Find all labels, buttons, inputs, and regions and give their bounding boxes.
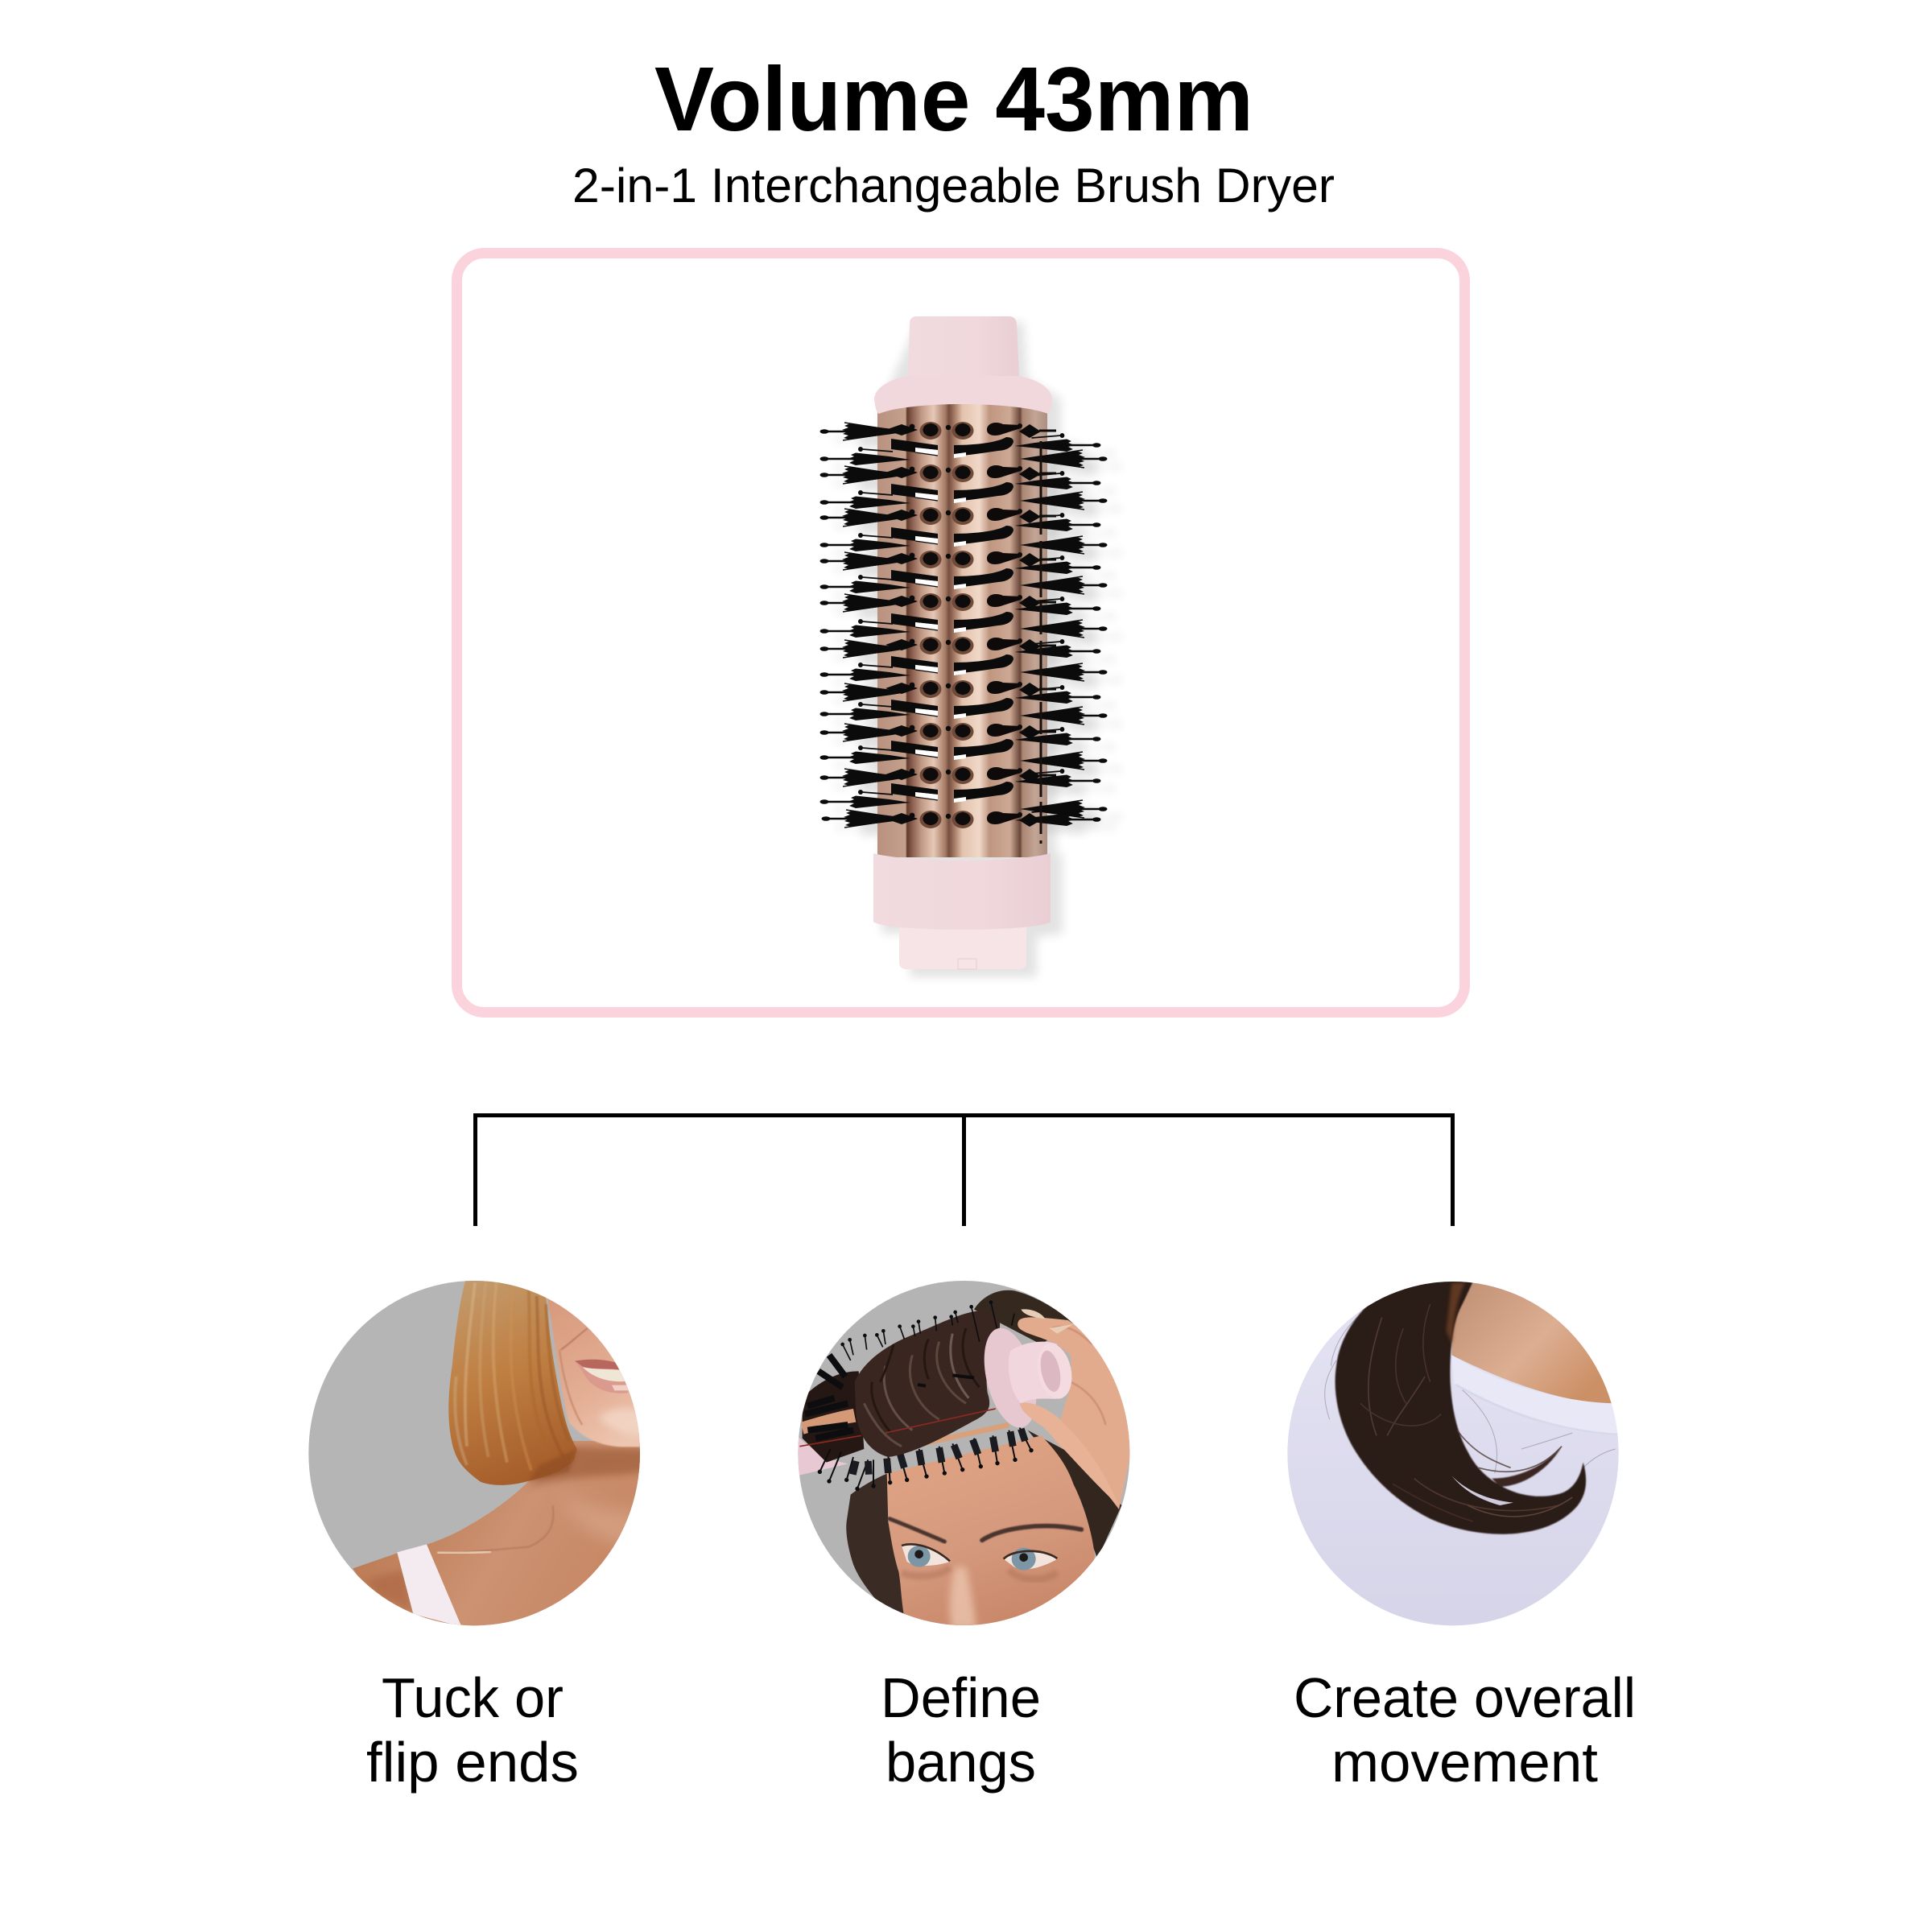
face — [547, 1298, 640, 1447]
hair — [448, 1278, 577, 1485]
lower bristles — [818, 1427, 1034, 1491]
side hair right — [1028, 1430, 1121, 1559]
side hair left — [846, 1473, 906, 1616]
barrel slots — [891, 437, 1013, 803]
bristle tufts — [819, 423, 1108, 828]
label: create overall movement: Create overall — [1294, 1666, 1636, 1729]
brush shadow — [834, 322, 1122, 977]
white tank strap — [397, 1544, 461, 1627]
hair wrapped on brush — [855, 1311, 1000, 1457]
brush barrel — [877, 394, 1047, 857]
hand — [1018, 1317, 1131, 1509]
label: define bangs — [881, 1666, 1041, 1794]
title: Volume 43mm — [654, 48, 1253, 150]
label: tuck or flip ends: Tuck or — [382, 1666, 564, 1729]
label: tuck or flip ends — [366, 1666, 579, 1794]
label: create overall movement — [1294, 1666, 1636, 1794]
subtitle: 2-in-1 Interchangeable Brush Dryer — [572, 159, 1335, 213]
photo: define bangs — [798, 1281, 1130, 1625]
connector bracket — [473, 1113, 1455, 1226]
hair lock — [1335, 1278, 1586, 1534]
outer vertical seam — [1040, 441, 1042, 844]
eyebrows — [890, 1519, 1081, 1542]
label: create overall movement: movement — [1331, 1731, 1598, 1794]
upper bristle tips — [805, 1300, 1014, 1439]
handle and left brush — [797, 1435, 848, 1476]
label: define bangs: bangs — [886, 1731, 1036, 1794]
face — [887, 1435, 1095, 1629]
bottom collar — [873, 853, 1051, 930]
fingers and nails — [1018, 1322, 1055, 1343]
panel: product frame — [457, 253, 1465, 1013]
label: define bangs: Define — [881, 1666, 1041, 1729]
thumb — [1019, 1402, 1110, 1497]
barrel stripe — [924, 1422, 1009, 1446]
top flange — [874, 376, 1052, 414]
shoulder and neck skin — [353, 1441, 640, 1626]
wisps behind — [1325, 1315, 1616, 1473]
top cap — [908, 316, 1019, 378]
barrel holes — [886, 422, 1056, 828]
neck skin — [1451, 1282, 1612, 1404]
photo: tuck or flip ends — [308, 1281, 640, 1626]
photo: create overall movement — [1287, 1282, 1619, 1626]
eyes — [902, 1544, 1057, 1571]
label: tuck or flip ends: flip ends — [366, 1731, 579, 1794]
lips and teeth — [575, 1360, 629, 1393]
back hair — [974, 1290, 1073, 1344]
red detail — [799, 1409, 996, 1447]
product image: round brush attachment — [819, 316, 1122, 977]
base nozzle — [899, 926, 1026, 969]
pink cap — [984, 1328, 1072, 1428]
shirt collar — [1451, 1355, 1618, 1435]
